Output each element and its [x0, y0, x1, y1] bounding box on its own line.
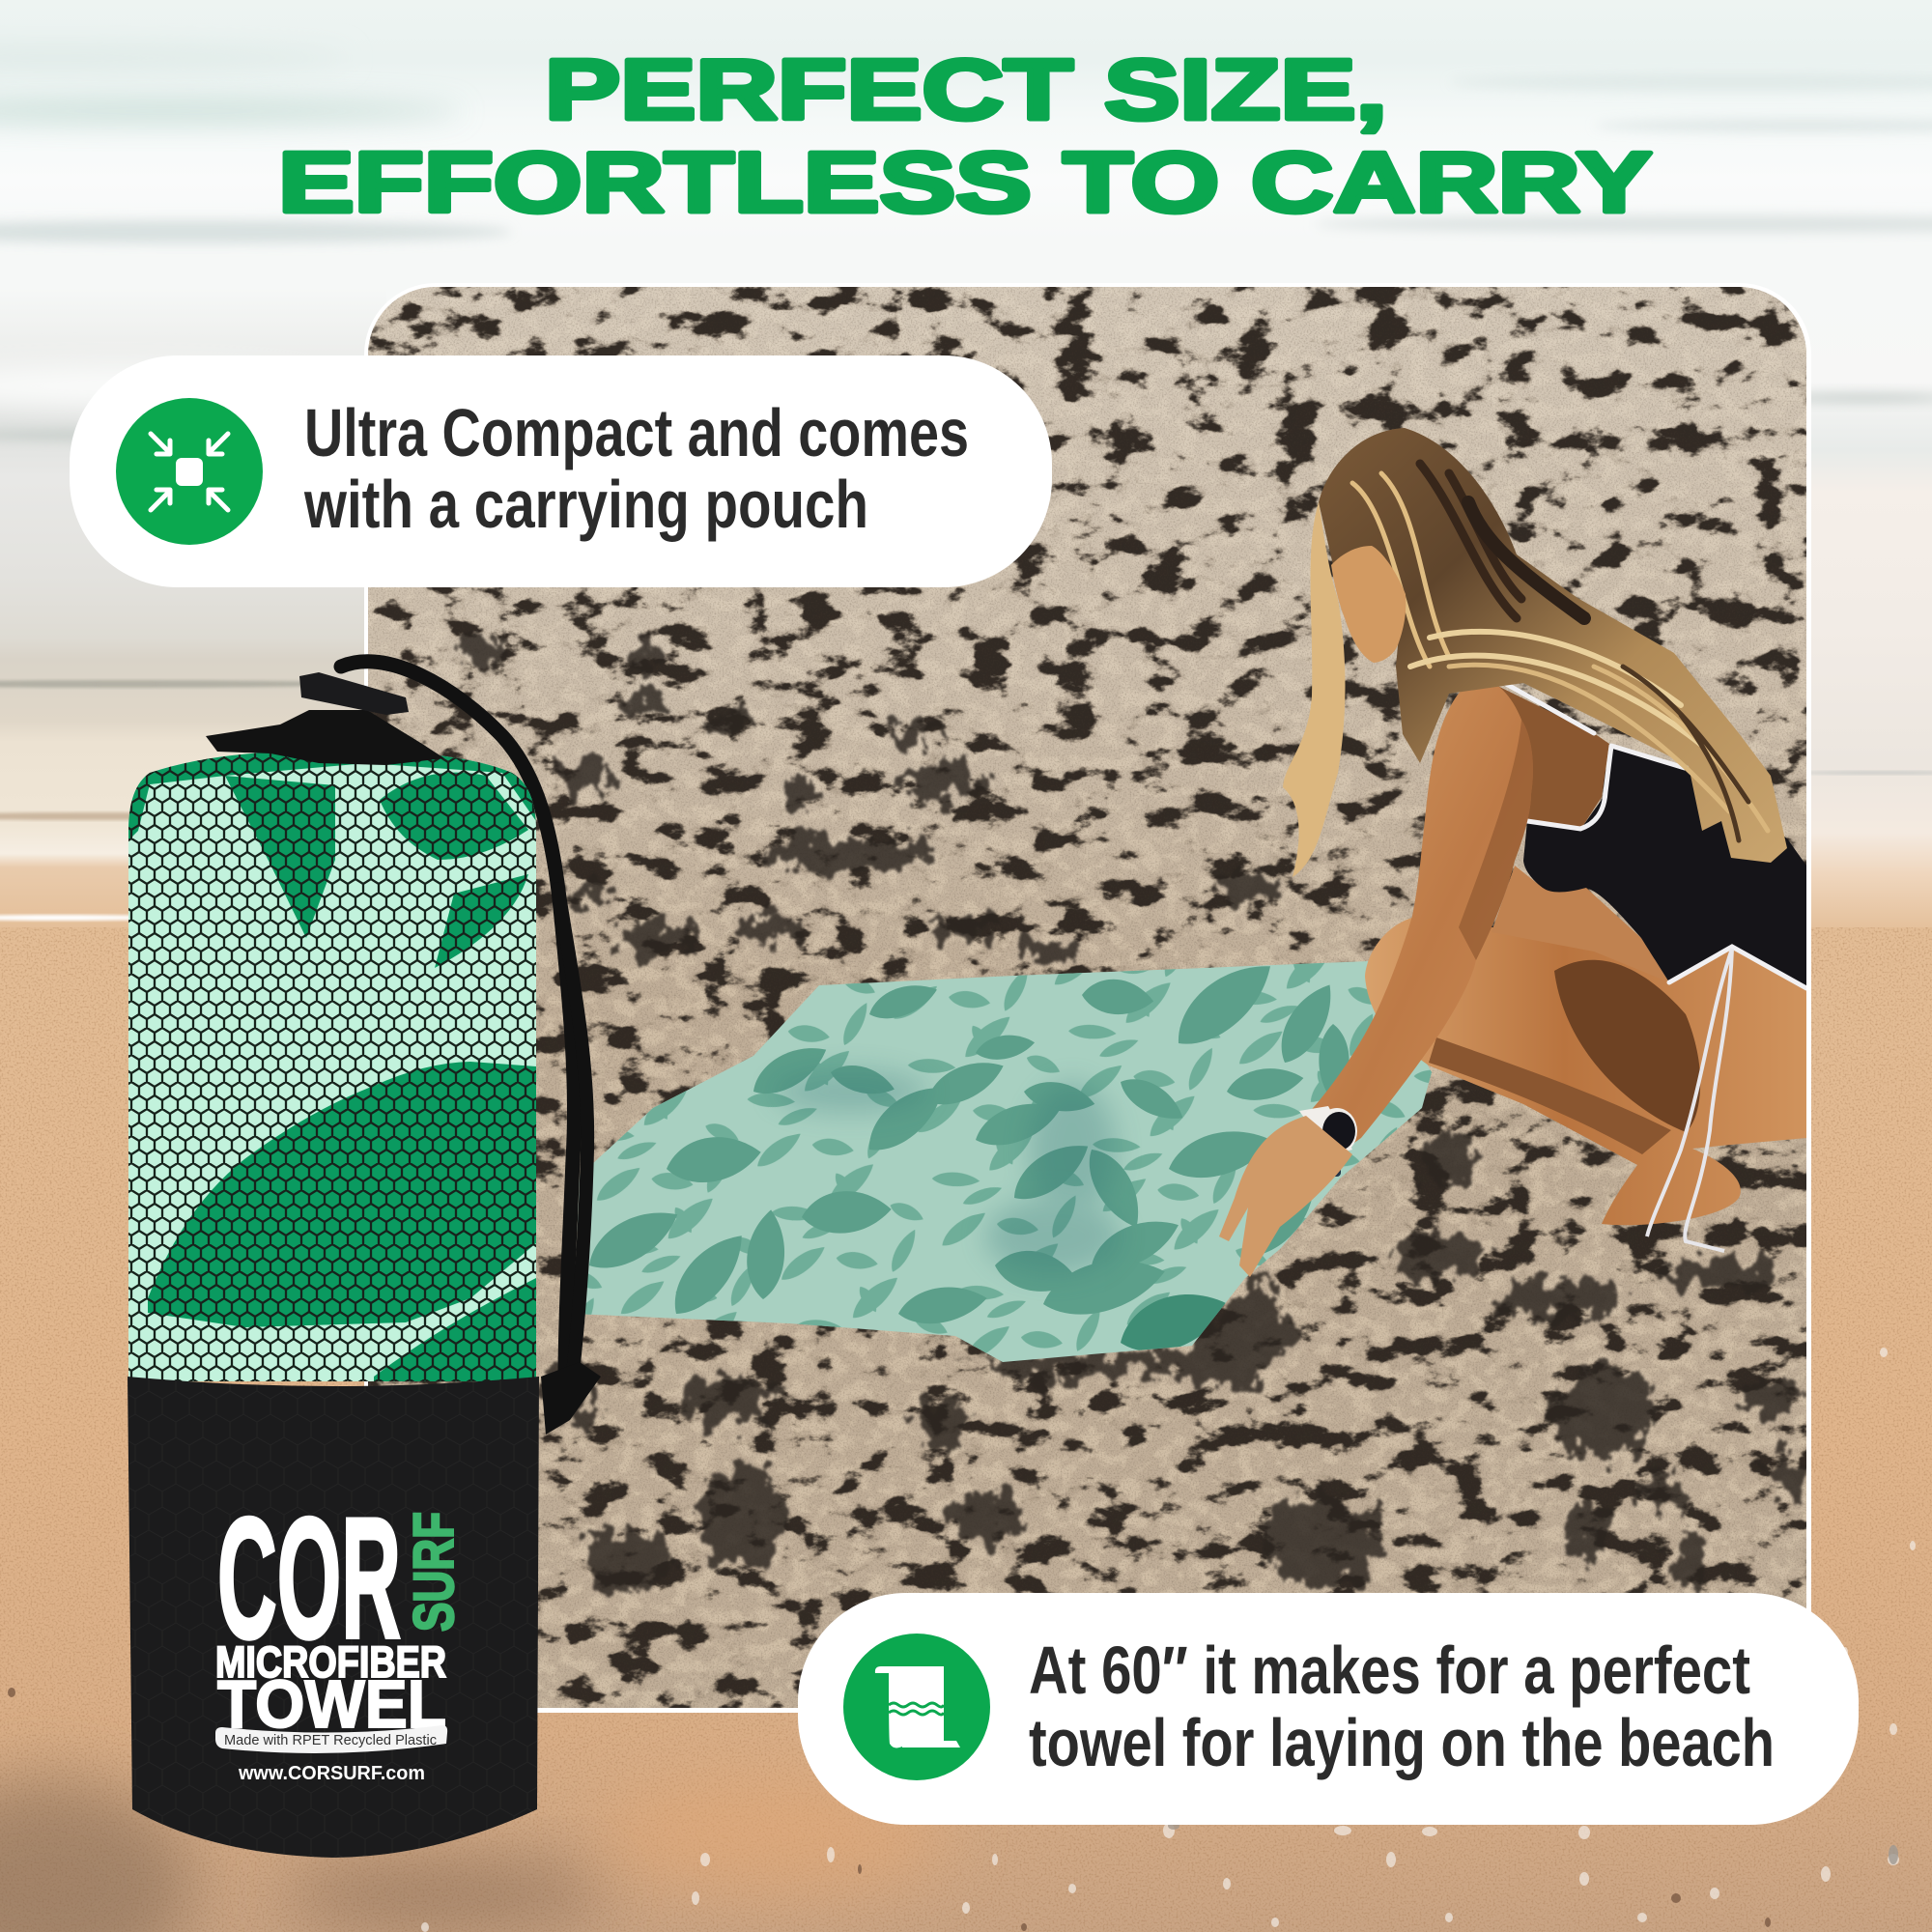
callout pill: 60 inch towel: [798, 1593, 1859, 1825]
title: PERFECT SIZE,: [545, 42, 1387, 137]
footprint shadows: [458, 636, 1801, 1593]
text: callout one: with a carrying pouch: [303, 467, 868, 542]
text: callout two: At 60″ it makes for a perfect: [1029, 1633, 1750, 1708]
brand logo: COR: [217, 1482, 401, 1674]
brand logo: Made with RPET Recycled Plastic: [224, 1732, 437, 1748]
shell pebbles: [421, 1348, 1916, 1932]
black swimsuit: [1523, 744, 1806, 988]
cord knot: [541, 1362, 601, 1435]
towel inside mesh: [128, 744, 539, 1381]
brand logo: MICROFIBER: [215, 1637, 446, 1687]
thigh and lower leg: [1365, 918, 1806, 1225]
woman: [1219, 428, 1806, 1277]
back and armpit shade: [1499, 686, 1609, 827]
title: EFFORTLESS TO CARRY: [278, 134, 1652, 230]
watch: [1299, 1106, 1357, 1177]
bag shadow and damp sand: [0, 1777, 193, 1932]
product: mesh carrying pouch: [128, 662, 601, 1858]
brand logo: [215, 1482, 466, 1784]
drawstring closure and toggle: [206, 672, 444, 765]
hair left strands: [1283, 502, 1345, 877]
towel on the sand: [570, 948, 1439, 1372]
drawstring ties: [1647, 949, 1732, 1251]
hair: [1319, 428, 1787, 863]
face: [1331, 546, 1406, 663]
black base: [128, 1377, 539, 1858]
text: callout one: [303, 395, 969, 542]
brand logo: www.CORSURF.com: [238, 1763, 425, 1784]
hair strands: [1352, 464, 1768, 840]
icon: towel: [843, 1634, 990, 1780]
hand: [1219, 1116, 1352, 1277]
sand texture: [368, 287, 1806, 1708]
sea foam streaks: [0, 46, 1932, 921]
arm and shoulder: [1306, 677, 1533, 1154]
brand logo: TOWEL: [217, 1666, 446, 1742]
title: [278, 42, 1652, 230]
text: callout one: Ultra Compact and comes: [304, 395, 969, 470]
callout pill: ultra compact: [70, 355, 1052, 587]
brand logo: SURF: [403, 1512, 466, 1632]
photo panel: woman spreading towel on sand: [364, 283, 1811, 1713]
drawstring cord: [341, 662, 587, 1381]
text: callout two: [1029, 1633, 1775, 1780]
icon: compress arrows: [116, 398, 263, 545]
